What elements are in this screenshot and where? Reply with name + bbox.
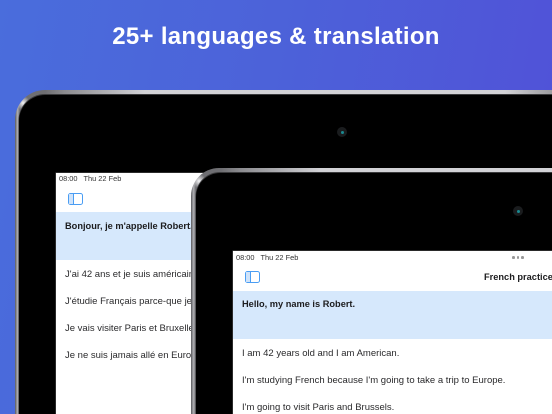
front tablet — [191, 168, 552, 414]
front tablet camera — [513, 206, 523, 216]
title: 25+ languages & translation — [112, 23, 440, 50]
multitasking dots — [512, 256, 524, 259]
French sentence 1: J'ai 42 ans et je suis américain. — [65, 269, 197, 280]
conversation title: French practice — [484, 272, 552, 282]
back tablet camera — [337, 127, 347, 137]
status bar: 08:00 Thu 22 Feb — [59, 174, 121, 183]
front tablet bezel — [196, 173, 552, 414]
English sentence 1: I am 42 years old and I am American. — [242, 348, 399, 359]
status bar: 08:00 Thu 22 Feb — [236, 253, 298, 262]
highlighted English sentence: Hello, my name is Robert. — [242, 299, 355, 309]
French sentence 4: Je ne suis jamais allé en Europe. — [65, 350, 204, 361]
front tablet screen — [233, 251, 552, 414]
highlighted sentence band — [56, 212, 216, 260]
back tablet — [15, 90, 552, 414]
back tablet screen — [56, 173, 216, 414]
icon: sidebar — [245, 271, 260, 283]
highlighted French sentence: Bonjour, je m'appelle Robert. — [65, 221, 193, 231]
highlighted sentence band — [233, 291, 552, 339]
French sentence 2: J'étudie Français parce-que je vais — [65, 296, 212, 307]
back tablet frame — [15, 90, 552, 414]
front tablet frame — [191, 168, 552, 414]
back tablet bezel — [19, 95, 552, 414]
English sentence 3: I'm going to visit Paris and Brussels. — [242, 402, 394, 413]
French sentence 3: Je vais visiter Paris et Bruxelles. — [65, 323, 201, 334]
icon: sidebar — [68, 193, 83, 205]
English sentence 2: I'm studying French because I'm going to take a trip to Europe. — [242, 375, 505, 386]
